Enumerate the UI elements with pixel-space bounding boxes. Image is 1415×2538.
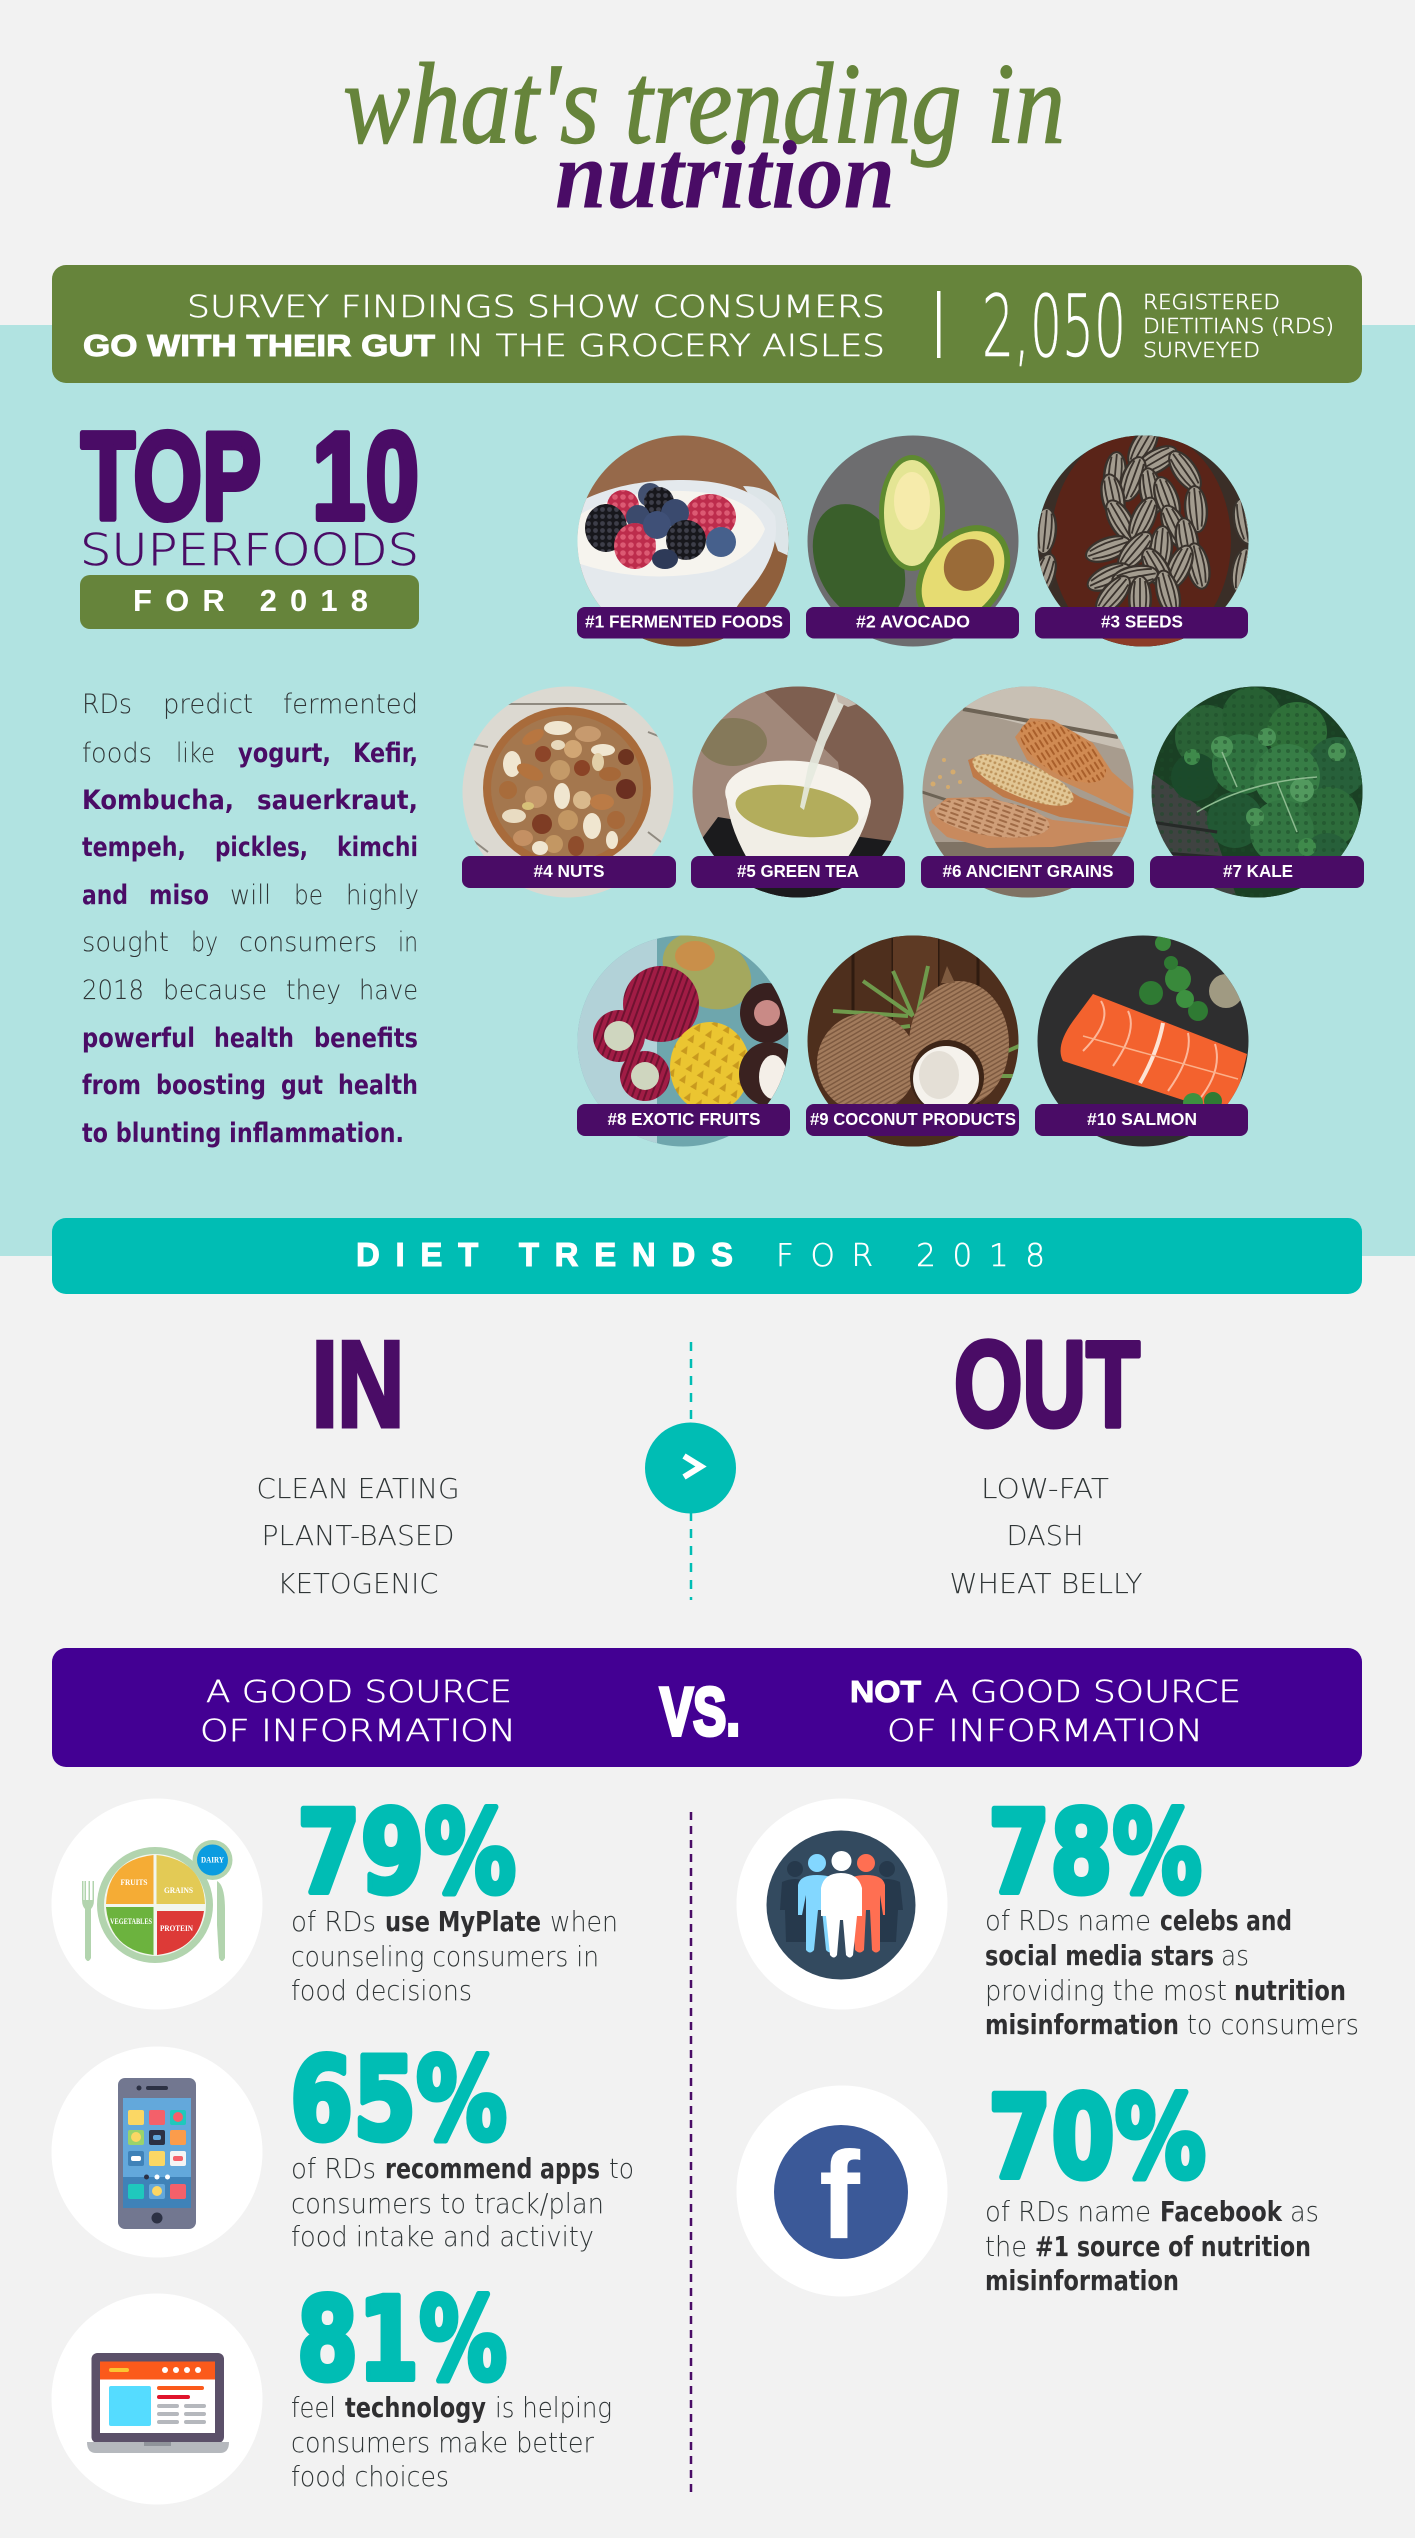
photo: exotic fruits <box>578 936 788 1146</box>
heading: in: IN <box>312 1316 404 1452</box>
stat: 81 percent: technology <box>345 2391 486 2424</box>
stat: 70 percent: of RDs name <box>985 2195 1151 2228</box>
stat: 70 percent: as <box>1290 2195 1319 2228</box>
survey count label: DIETITIANS (RDS) <box>1143 314 1334 338</box>
banner: good vs not good source: OF INFORMATION <box>200 1714 516 1749</box>
stat: 70 percent: misinformation <box>985 2264 1179 2297</box>
text block: superfoods intro: miso <box>149 880 209 911</box>
list: out trends: WHEAT BELLY <box>950 1568 1143 1600</box>
divider: good vs not good <box>690 1812 692 2498</box>
text block: superfoods intro: sought <box>82 927 169 958</box>
stat: 79 percent: of RDs <box>291 1905 376 1938</box>
text block: superfoods intro: they <box>286 975 341 1006</box>
icon: facebook <box>736 2086 948 2296</box>
label: exotic fruits <box>577 1104 790 1136</box>
label: kale: #7 KALE <box>1223 861 1293 881</box>
divider: in versus out <box>645 1342 736 1600</box>
survey count: 2,050 <box>982 277 1126 377</box>
label: coconut products <box>806 1104 1019 1136</box>
text block: superfoods intro: yogurt, <box>238 738 331 769</box>
heading: top 10 superfoods: SUPERFOODS <box>80 525 419 576</box>
list: out trends: DASH <box>1006 1520 1084 1552</box>
label: kale <box>1150 856 1364 888</box>
list: in trends <box>256 1473 460 1600</box>
stat: 79 percent: food decisions <box>291 1974 472 2007</box>
stat: 79 percent <box>291 1786 618 2007</box>
list: in trends: KETOGENIC <box>278 1568 438 1600</box>
stat: 81 percent: consumers make better <box>291 2426 594 2459</box>
label: avocado: #2 AVOCADO <box>856 612 970 632</box>
icon: facebook: f <box>819 2127 861 2265</box>
text block: superfoods intro: powerful <box>82 1023 195 1054</box>
stat: 78 percent: as <box>1221 1939 1249 1972</box>
icon: people <box>736 1798 948 2010</box>
banner headline: IN THE GROCERY AISLES <box>447 329 885 364</box>
heading: top 10 superfoods: FOR 2018 <box>133 583 368 618</box>
photo: fermented foods <box>577 435 789 647</box>
survey count label: REGISTERED <box>1143 290 1280 314</box>
banner headline <box>83 290 885 364</box>
label: ancient grains: #6 ANCIENT GRAINS <box>942 861 1114 881</box>
stat: 79 percent: when <box>550 1905 618 1938</box>
photo: avocado <box>808 436 1018 646</box>
text block: superfoods intro: RDs <box>82 689 132 720</box>
survey count label: SURVEYED <box>1143 338 1260 362</box>
icon: smartphone <box>52 2046 262 2258</box>
stat: 70 percent: the <box>985 2230 1027 2263</box>
text block: superfoods intro: fermented <box>283 689 418 720</box>
text block: superfoods intro: kimchi <box>337 832 418 863</box>
label: avocado <box>806 607 1019 638</box>
label: green tea <box>691 856 905 888</box>
banner: good vs not good source <box>52 1648 1362 1767</box>
stat: 70 percent: Facebook <box>1160 2195 1283 2228</box>
stat: 78 percent: misinformation <box>985 2008 1179 2041</box>
text block: superfoods intro: pickles, <box>215 832 308 863</box>
banner headline: GO WITH THEIR GUT <box>83 328 435 363</box>
stat: 81 percent: 81% <box>297 2273 507 2406</box>
icon: myplate: GRAINS <box>164 1885 193 1895</box>
survey count label <box>1143 290 1334 362</box>
title: what's trending in <box>343 40 1065 169</box>
label: nuts: #4 NUTS <box>534 861 604 881</box>
icon: laptop <box>52 2294 262 2504</box>
stat: 78 percent: to consumers <box>1187 2008 1359 2041</box>
banner: survey findings <box>52 265 1362 383</box>
text block: superfoods intro: tempeh, <box>82 832 186 863</box>
text block: superfoods intro: health <box>338 1070 418 1101</box>
stat: 78 percent <box>985 1786 1359 2041</box>
stat: 65 percent: to <box>609 2152 634 2185</box>
stat: 78 percent: nutrition <box>1234 1974 1346 2007</box>
text block: superfoods intro: will <box>230 880 271 911</box>
stat: 81 percent: food choices <box>291 2460 449 2493</box>
icon: arrow circle <box>645 1422 736 1514</box>
photo: salmon <box>1037 935 1249 1147</box>
banner: good vs not good source: A GOOD SOURCE <box>934 1675 1241 1710</box>
stat: 78 percent: providing the most <box>985 1974 1227 2007</box>
banner: good vs not good source: OF INFORMATION <box>887 1714 1203 1749</box>
banner: diet trends <box>52 1218 1362 1294</box>
text block: superfoods intro: because <box>163 975 267 1006</box>
stat: 70 percent: #1 source of nutrition <box>1035 2230 1311 2263</box>
stat: 65 percent: food intake and activity <box>291 2220 594 2253</box>
label: salmon: #10 SALMON <box>1087 1109 1197 1129</box>
icon: myplate <box>52 1798 262 2010</box>
label: exotic fruits: #8 EXOTIC FRUITS <box>608 1109 760 1129</box>
label: salmon <box>1035 1104 1248 1136</box>
photo: ancient grains <box>922 686 1134 898</box>
stat: 81 percent <box>291 2273 612 2493</box>
stat: 78 percent: of RDs name <box>985 1904 1151 1937</box>
text block: superfoods intro: to blunting inflammation. <box>82 1118 404 1149</box>
photo: coconut products <box>807 935 1019 1147</box>
heading: top 10 superfoods: 10 <box>312 408 419 546</box>
banner: good vs not good source: VS. <box>660 1674 740 1750</box>
text block: superfoods intro: like <box>176 738 215 769</box>
stat: 78 percent: 78% <box>988 1786 1202 1919</box>
text block: superfoods intro: boosting <box>156 1070 266 1101</box>
list: in trends: PLANT-BASED <box>262 1520 454 1552</box>
stat: 78 percent: celebs and <box>1160 1904 1292 1937</box>
heading: out: OUT <box>954 1316 1140 1452</box>
text block: superfoods intro: and <box>82 880 128 911</box>
text block: superfoods intro: consumers <box>239 927 377 958</box>
photo: kale <box>1151 686 1367 898</box>
text block: superfoods intro: Kombucha, <box>82 785 234 816</box>
stat: 81 percent: feel <box>291 2391 336 2424</box>
icon: myplate: DAIRY <box>201 1854 224 1864</box>
banner: diet trends: FOR 2018 <box>776 1238 1045 1274</box>
text block: superfoods intro: gut <box>281 1070 323 1101</box>
text block: superfoods intro: have <box>359 975 418 1006</box>
icon: myplate: FRUITS <box>120 1877 148 1887</box>
stat: 78 percent: social media stars <box>985 1939 1214 1972</box>
text block: superfoods intro: from <box>82 1070 141 1101</box>
text block: superfoods intro: sauerkraut, <box>257 785 418 816</box>
stat: 65 percent <box>290 2033 634 2253</box>
label: fermented foods: #1 FERMENTED FOODS <box>585 612 783 632</box>
text block: superfoods intro: benefits <box>314 1023 418 1054</box>
title <box>343 40 1065 229</box>
text block: superfoods intro: foods <box>82 738 152 769</box>
stat: 70 percent: 70% <box>988 2071 1206 2204</box>
stat: 65 percent: of RDs <box>291 2152 376 2185</box>
text block: superfoods intro: predict <box>163 689 253 720</box>
label: seeds <box>1035 607 1248 638</box>
banner: good vs not good source: A GOOD SOURCE <box>206 1675 512 1710</box>
text block: superfoods intro: Kefir, <box>353 738 418 769</box>
label: fermented foods <box>577 607 790 638</box>
banner headline: SURVEY FINDINGS SHOW CONSUMERS <box>187 290 885 325</box>
heading: top 10 superfoods <box>80 408 419 629</box>
icon: myplate: VEGETABLES <box>110 1916 152 1926</box>
stat: 65 percent: 65% <box>290 2033 507 2166</box>
photo: nuts <box>462 686 674 898</box>
list: in trends: CLEAN EATING <box>256 1473 460 1505</box>
stat: 81 percent: is helping <box>495 2391 612 2424</box>
icon: myplate: PROTEIN <box>160 1923 194 1933</box>
photo: seeds <box>1038 436 1248 646</box>
text block: superfoods intro <box>82 689 419 1149</box>
stat: 65 percent: recommend apps <box>385 2152 600 2185</box>
text block: superfoods intro: highly <box>346 880 419 911</box>
banner: diet trends: DIET TRENDS <box>356 1236 733 1273</box>
text block: superfoods intro: by <box>191 927 218 958</box>
photo: green tea <box>692 686 904 898</box>
stat: 79 percent: 79% <box>297 1786 516 1919</box>
label: coconut products: #9 COCONUT PRODUCTS <box>810 1109 1016 1129</box>
text block: superfoods intro: in <box>398 927 418 958</box>
label: green tea: #5 GREEN TEA <box>737 861 859 881</box>
label: seeds: #3 SEEDS <box>1101 612 1183 632</box>
label: ancient grains <box>921 856 1134 888</box>
list: out trends <box>950 1473 1143 1600</box>
text block: superfoods intro: be <box>294 880 323 911</box>
text block: superfoods intro: health <box>214 1023 294 1054</box>
panel: superfoods background <box>0 325 1415 1256</box>
label: nuts <box>462 856 676 888</box>
text block: superfoods intro: 2018 <box>82 975 144 1006</box>
list: out trends: LOW-FAT <box>981 1473 1109 1505</box>
stat: 79 percent: counseling consumers in <box>291 1940 599 1973</box>
stat: 79 percent: use MyPlate <box>385 1905 541 1938</box>
heading: top 10 superfoods: TOP <box>81 408 261 546</box>
stat: 70 percent <box>985 2071 1319 2297</box>
title: nutrition <box>555 122 895 229</box>
banner: good vs not good source: NOT <box>850 1674 921 1709</box>
stat: 65 percent: consumers to track/plan <box>291 2187 604 2220</box>
